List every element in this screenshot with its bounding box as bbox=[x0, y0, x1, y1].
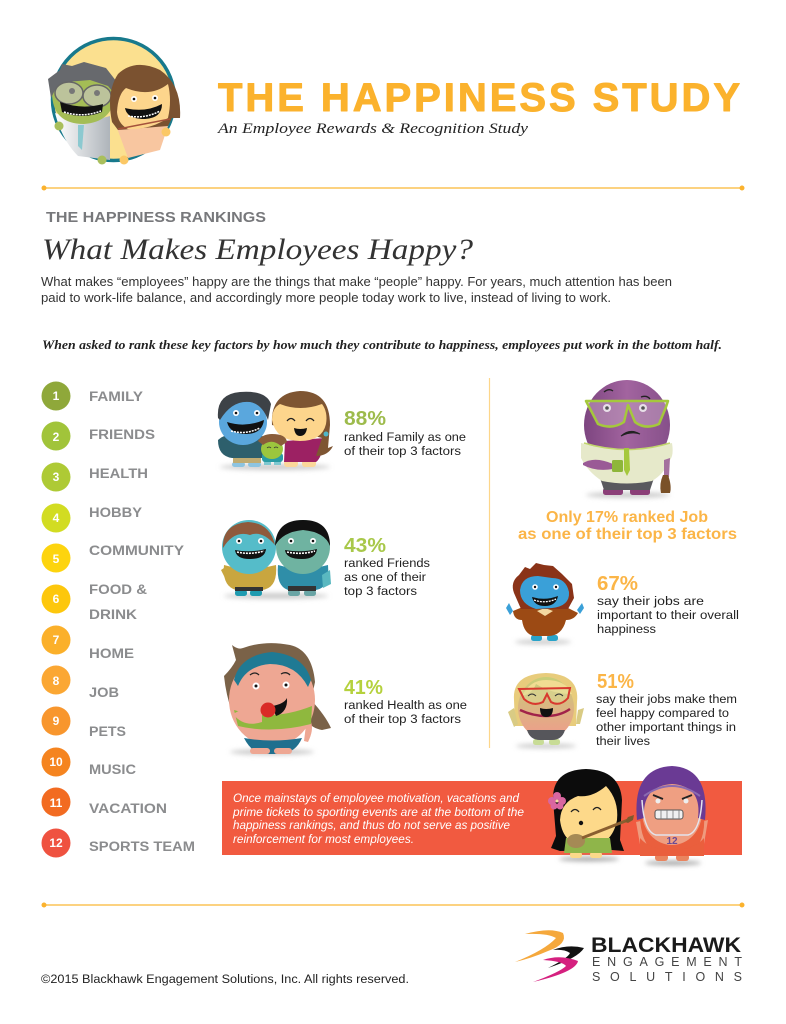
67 percent stat: say their jobs are bbox=[597, 594, 704, 608]
hula girl character bbox=[548, 769, 634, 862]
41 percent stat: ranked Health as one bbox=[344, 698, 467, 712]
section heading: What Makes Employees Happy? bbox=[42, 233, 473, 266]
header badge: two characters in a circle bbox=[48, 38, 180, 164]
banner text: prime tickets to sporting events are at the bottom of the bbox=[232, 805, 524, 819]
rank 5 community bbox=[42, 543, 184, 572]
rank 10 music: MUSIC bbox=[89, 762, 136, 777]
rank 12 sports team: SPORTS TEAM bbox=[89, 839, 195, 854]
rank 7 home bbox=[42, 626, 134, 661]
rank 6 food and drink bbox=[42, 582, 147, 622]
rank 5 community: 5 bbox=[53, 552, 60, 566]
copyright: ©2015 Blackhawk Engagement Solutions, Inc. All rights reserved. bbox=[41, 972, 409, 986]
rank 9 pets: 9 bbox=[53, 714, 60, 728]
lead-in sentence: When asked to rank these key factors by how much they contribute to happiness, employees put work in the bottom half. bbox=[42, 337, 722, 352]
67 percent stat: important to their overall bbox=[597, 608, 739, 622]
rank 10 music bbox=[42, 748, 136, 777]
orange callout banner bbox=[222, 766, 742, 866]
41 percent stat: 41% bbox=[344, 677, 383, 699]
rank 8 job bbox=[42, 666, 119, 700]
banner text: reinforcement for most employees. bbox=[233, 832, 414, 846]
rank 3 health: 3 bbox=[53, 470, 60, 484]
rank 8 job: 8 bbox=[53, 674, 60, 688]
rank 4 hobby: HOBBY bbox=[89, 505, 142, 520]
rank 4 hobby: 4 bbox=[53, 511, 60, 525]
rank 1 family: FAMILY bbox=[89, 389, 143, 404]
banner text bbox=[232, 791, 524, 846]
character with red hair bbox=[506, 563, 584, 644]
43 percent stat: top 3 factors bbox=[344, 584, 417, 598]
job character with glasses bbox=[581, 380, 673, 498]
51 percent stat: say their jobs make them bbox=[596, 692, 737, 706]
67 percent stat bbox=[597, 573, 739, 636]
41 percent stat: of their top 3 factors bbox=[344, 712, 461, 726]
rank 11 vacation: 11 bbox=[50, 796, 63, 810]
Blackhawk logo bbox=[515, 930, 742, 984]
football player character: 12 bbox=[666, 836, 678, 847]
rank 7 home: HOME bbox=[89, 646, 134, 661]
43 percent stat: ranked Friends bbox=[344, 556, 430, 570]
51 percent stat: 51% bbox=[597, 671, 634, 693]
banner text: happiness rankings, and thus do not serve as positive bbox=[233, 818, 510, 832]
Blackhawk logo: BLACKHAWK bbox=[591, 934, 741, 957]
ranking list bbox=[42, 382, 195, 858]
health character bbox=[224, 643, 331, 755]
Blackhawk logo: ENGAGEMENT bbox=[592, 955, 742, 969]
football player character bbox=[636, 766, 708, 866]
rank 8 job: JOB bbox=[89, 685, 119, 700]
rank 2 friends bbox=[42, 422, 155, 450]
51 percent stat bbox=[596, 671, 737, 748]
rank 5 community: COMMUNITY bbox=[89, 543, 184, 558]
51 percent stat: other important things in bbox=[596, 720, 736, 734]
rank 11 vacation: VACATION bbox=[89, 801, 167, 816]
section label: THE HAPPINESS RANKINGS bbox=[46, 210, 266, 226]
title: THE HAPPINESS STUDY bbox=[218, 76, 740, 120]
friends characters bbox=[221, 520, 331, 599]
rank 9 pets: PETS bbox=[89, 724, 126, 739]
rank 10 music: 10 bbox=[49, 755, 63, 769]
subtitle: An Employee Rewards & Recognition Study bbox=[217, 121, 528, 137]
rank 2 friends: FRIENDS bbox=[89, 427, 155, 442]
17 percent callout: as one of their top 3 factors bbox=[518, 526, 737, 543]
rank 9 pets bbox=[42, 706, 126, 739]
column divider bbox=[488, 378, 490, 748]
88 percent stat: 88% bbox=[344, 408, 386, 430]
17 percent callout bbox=[518, 509, 737, 543]
rank 11 vacation bbox=[42, 788, 167, 816]
41 percent stat bbox=[344, 677, 467, 726]
88 percent stat: ranked Family as one bbox=[344, 430, 466, 444]
top divider bbox=[42, 186, 744, 190]
woman character bbox=[110, 65, 180, 164]
67 percent stat: happiness bbox=[597, 622, 656, 636]
rank 1 family: 1 bbox=[53, 389, 60, 403]
43 percent stat: as one of their bbox=[344, 570, 426, 584]
51 percent stat: feel happy compared to bbox=[596, 706, 729, 720]
rank 4 hobby bbox=[42, 504, 142, 532]
banner text: Once mainstays of employee motivation, vacations and bbox=[233, 791, 520, 805]
88 percent stat: of their top 3 factors bbox=[344, 444, 461, 458]
rank 7 home: 7 bbox=[53, 633, 60, 647]
rank 6 food and drink: FOOD & bbox=[89, 582, 147, 597]
51 percent stat: their lives bbox=[596, 734, 650, 748]
43 percent stat: 43% bbox=[344, 535, 386, 557]
rank 1 family bbox=[42, 382, 143, 410]
rank 12 sports team bbox=[42, 828, 195, 858]
man character bbox=[48, 62, 120, 164]
rank 3 health bbox=[42, 462, 148, 492]
17 percent callout: Only 17% ranked Job bbox=[546, 509, 708, 526]
family characters bbox=[218, 391, 333, 470]
rank 3 health: HEALTH bbox=[89, 466, 148, 481]
rank 6 food and drink: DRINK bbox=[89, 607, 137, 622]
blonde character with red glasses bbox=[508, 673, 584, 748]
rank 2 friends: 2 bbox=[53, 430, 60, 444]
bottom divider bbox=[42, 902, 744, 908]
intro paragraph bbox=[41, 274, 672, 305]
Blackhawk logo: SOLUTIONS bbox=[592, 970, 742, 984]
43 percent stat bbox=[344, 535, 430, 598]
88 percent stat bbox=[344, 408, 466, 458]
intro paragraph: What makes “employees” happy are the things that make “people” happy. For years, much attention has been bbox=[41, 274, 672, 289]
67 percent stat: 67% bbox=[597, 573, 638, 595]
rank 12 sports team: 12 bbox=[49, 836, 63, 850]
intro paragraph: paid to work-life balance, and accordingly more people today work to live, instead of living to work. bbox=[41, 290, 611, 305]
rank 6 food and drink: 6 bbox=[53, 592, 60, 606]
